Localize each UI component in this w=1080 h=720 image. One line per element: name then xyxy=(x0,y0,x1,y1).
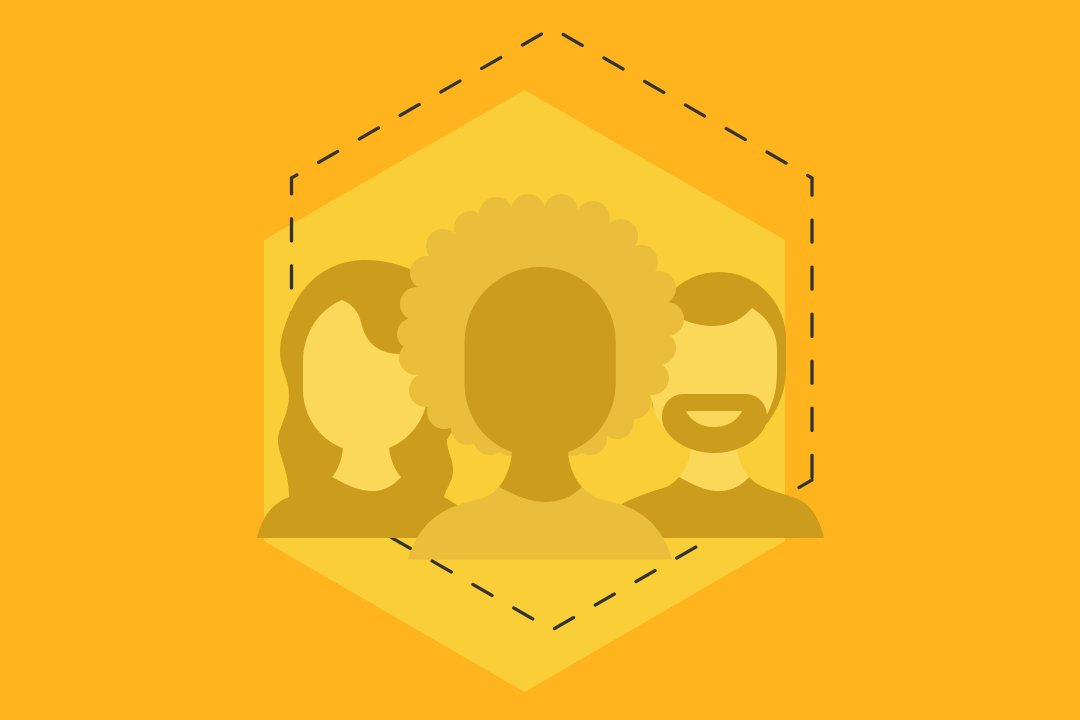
man face xyxy=(640,300,777,445)
central head and neck xyxy=(464,267,616,502)
central body xyxy=(408,487,672,560)
man neck xyxy=(679,448,749,491)
dashed hexagon outline xyxy=(292,28,812,630)
curly hair xyxy=(397,194,684,456)
man body xyxy=(600,477,824,538)
woman face xyxy=(303,300,428,453)
icon: central person with curly hair xyxy=(397,194,684,560)
man mouth xyxy=(686,411,742,427)
solid hexagon xyxy=(264,90,785,692)
man hair xyxy=(652,272,786,440)
woman hair and body xyxy=(257,260,480,538)
woman neck xyxy=(332,447,401,491)
man beard xyxy=(662,394,767,453)
icon: man with beard xyxy=(600,272,824,538)
icon: woman with long hair xyxy=(257,260,480,538)
